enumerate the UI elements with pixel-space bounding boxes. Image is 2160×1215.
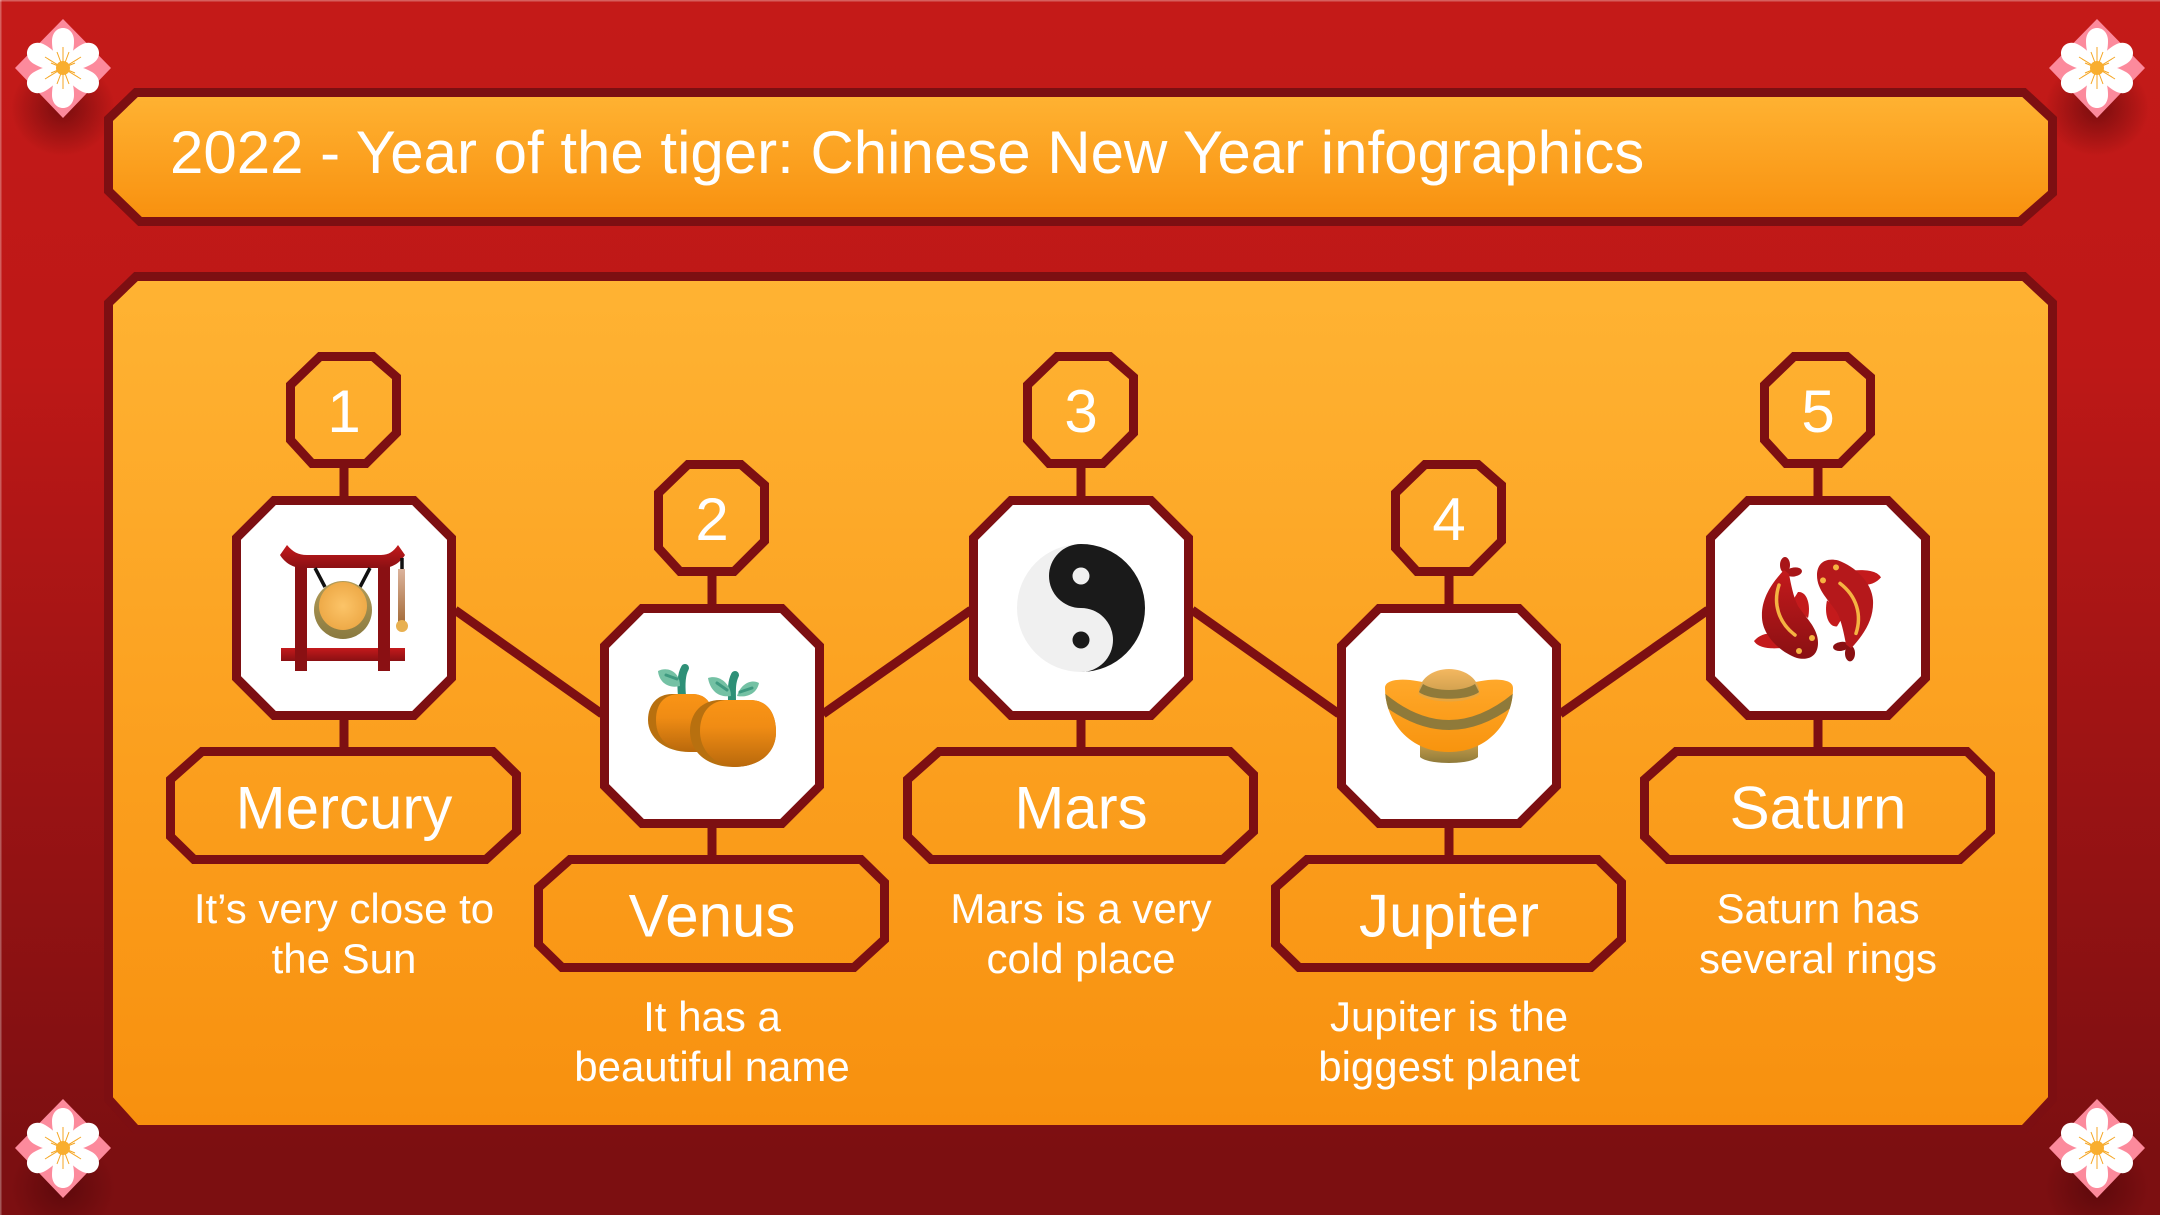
number badge 2 bbox=[658, 464, 764, 572]
number badge 1 bbox=[290, 356, 396, 464]
description 4: biggest planet bbox=[1318, 1043, 1580, 1090]
icon: gong bbox=[280, 545, 408, 671]
number badge 5 bbox=[1764, 356, 1870, 464]
description 3: cold place bbox=[986, 935, 1176, 982]
item 5: Saturn bbox=[1644, 356, 1990, 982]
label pill 3 bbox=[908, 752, 1254, 860]
flower: bottom right bbox=[2045, 1099, 2149, 1215]
icon: tangerines bbox=[648, 668, 776, 767]
description 5: Saturn has bbox=[1716, 885, 1920, 932]
label pill 5 bbox=[1644, 752, 1990, 860]
fish left bbox=[1754, 557, 1818, 659]
icon box 1 bbox=[236, 500, 452, 716]
flower: top right bbox=[2045, 19, 2149, 156]
fish right bbox=[1817, 560, 1881, 661]
label pill 4: Jupiter bbox=[1359, 882, 1539, 950]
item 3: Mars bbox=[908, 356, 1254, 982]
icon box 4 bbox=[1342, 608, 1556, 824]
icon: yin yang bbox=[1017, 544, 1145, 672]
number badge 3 bbox=[1028, 356, 1134, 464]
description 1: It’s very close to bbox=[194, 885, 494, 932]
icon: koi fish bbox=[1754, 557, 1881, 661]
number badge 1: 1 bbox=[327, 378, 361, 445]
label pill 1 bbox=[170, 752, 516, 860]
label pill 1: Mercury bbox=[236, 774, 452, 842]
title bar bbox=[108, 92, 2052, 222]
label pill 2: Venus bbox=[629, 882, 795, 950]
number badge 3: 3 bbox=[1064, 378, 1098, 445]
flower: bottom left bbox=[11, 1099, 115, 1215]
description 3: Mars is a very bbox=[950, 885, 1212, 932]
label pill 3: Mars bbox=[1014, 774, 1148, 842]
panel: main bbox=[108, 276, 2052, 1130]
number badge 2: 2 bbox=[695, 486, 729, 553]
flower: top left bbox=[11, 19, 115, 156]
number badge 5: 5 bbox=[1801, 378, 1835, 445]
connector lines bbox=[455, 610, 1708, 714]
item 1: Mercury bbox=[170, 356, 516, 982]
icon box 3 bbox=[974, 500, 1188, 716]
item 2: Venus bbox=[538, 464, 884, 1090]
icon: gold ingot bbox=[1380, 669, 1518, 763]
description 2: beautiful name bbox=[574, 1043, 850, 1090]
description 4: Jupiter is the bbox=[1330, 993, 1568, 1040]
icon box 5 bbox=[1710, 500, 1926, 716]
label pill 2 bbox=[538, 860, 884, 968]
label pill 4 bbox=[1276, 860, 1622, 968]
number badge 4: 4 bbox=[1432, 486, 1466, 553]
icon box 2 bbox=[604, 608, 820, 824]
label pill 5: Saturn bbox=[1730, 774, 1906, 842]
title: 2022 - Year of the tiger: Chinese New Year infographics bbox=[170, 119, 1644, 186]
description 5: several rings bbox=[1699, 935, 1937, 982]
item 4: Jupiter bbox=[1276, 464, 1622, 1090]
number badge 4 bbox=[1396, 464, 1502, 572]
description 1: the Sun bbox=[272, 935, 416, 982]
description 2: It has a bbox=[643, 993, 782, 1040]
